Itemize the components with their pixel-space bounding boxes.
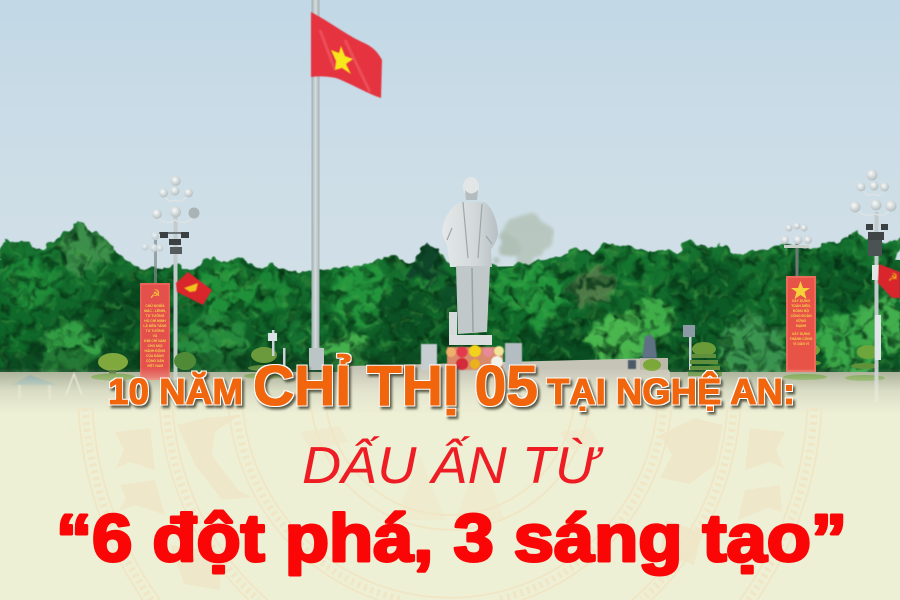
- left red banner: [140, 283, 170, 380]
- right red banner: [786, 276, 816, 372]
- plaza ground and steps: [0, 358, 900, 422]
- banner slogan: THÀNH CÔNG: [790, 336, 813, 341]
- banner slogan: VÀ: [153, 333, 158, 338]
- cream fade: [0, 368, 900, 414]
- banner slogan: VÌ DÂN VÌ: [793, 341, 809, 346]
- title part 3: TẠI NGHỆ AN:: [547, 370, 795, 412]
- tree line base: [0, 250, 900, 390]
- banner slogan: CHO MỌI: [148, 344, 162, 348]
- tree line: [0, 220, 900, 372]
- banner slogan: VIỆT NAM: [147, 363, 163, 368]
- topiary right: [643, 342, 885, 381]
- banner slogan: [790, 298, 813, 346]
- banner slogan: XÂY DỰNG: [792, 331, 810, 336]
- banner slogan: HÀNH ĐỘNG: [145, 348, 166, 353]
- small park lamps: [268, 325, 695, 370]
- title line: 10 năm Chỉ thị 05 tại Nghệ An: [108, 353, 795, 418]
- banner slogan: LÀ NỀN TẢNG: [143, 323, 167, 328]
- statue: [442, 177, 498, 345]
- banner slogan: CHỦ NGHĨA: [145, 303, 165, 308]
- right lamp post: [850, 170, 896, 402]
- dark leaf texture: [0, 222, 900, 372]
- banner slogan: MÁC - LÊNIN,: [144, 308, 166, 313]
- banner slogan: MẠNH: [796, 324, 807, 328]
- banner slogan: TƯ TƯỞNG: [146, 328, 165, 333]
- dark monument right of steps: [628, 334, 657, 369]
- flagpole: [309, 0, 324, 370]
- banner slogan: HỒ CHÍ MINH: [144, 318, 166, 323]
- party flag right: [878, 264, 900, 298]
- light leaf texture: [0, 228, 900, 372]
- background: cream panel: [0, 414, 900, 600]
- title part 1: 10 NĂM: [108, 371, 243, 412]
- pale tree behind statue: [495, 214, 549, 262]
- memorial stelae and flowers: [421, 343, 522, 370]
- drum motifs: birds and deer: [115, 415, 785, 590]
- banner slogan: CÔNG ĐOÀN: [790, 313, 812, 318]
- topiary left: [91, 347, 284, 382]
- banner slogan: KIM CHỈ NAM: [144, 338, 166, 343]
- background: sky: [0, 0, 900, 290]
- foliage clumps: [0, 224, 900, 382]
- party flag right: ☭: [888, 272, 898, 284]
- banner star: [791, 281, 810, 299]
- title part 2: CHỈ THỊ 05: [253, 353, 538, 418]
- banner slogan: VỮNG: [796, 318, 806, 323]
- party flag left: [176, 272, 212, 305]
- left lamp posts: [142, 176, 200, 380]
- banner hammer and sickle: ☭: [150, 287, 160, 301]
- bronze drum pattern: [78, 408, 822, 600]
- banner slogan: XÂY DỰNG: [792, 298, 810, 303]
- banner slogan: TOÀN DIỆN,: [791, 303, 811, 308]
- centre right lamp post: [781, 222, 812, 277]
- banner slogan: CỘNG SẢN: [146, 358, 165, 363]
- banner slogan: CỦA ĐẢNG: [146, 353, 164, 358]
- banner slogan: TƯ TƯỞNG: [146, 313, 165, 318]
- subtitle: dấu ấn từ: DẤU ẤN TỪ: [302, 436, 604, 495]
- park kiosks left: [12, 374, 82, 399]
- shade under trees: [0, 347, 421, 372]
- banner slogan: [143, 303, 167, 368]
- headline: 6 đột phá, 3 sáng tạo: “6 đột phá, 3 sáng tạo”: [56, 501, 847, 576]
- banner slogan: ĐỒNG BỘ: [793, 308, 809, 313]
- national flag: [311, 12, 382, 98]
- flag star: [331, 46, 353, 74]
